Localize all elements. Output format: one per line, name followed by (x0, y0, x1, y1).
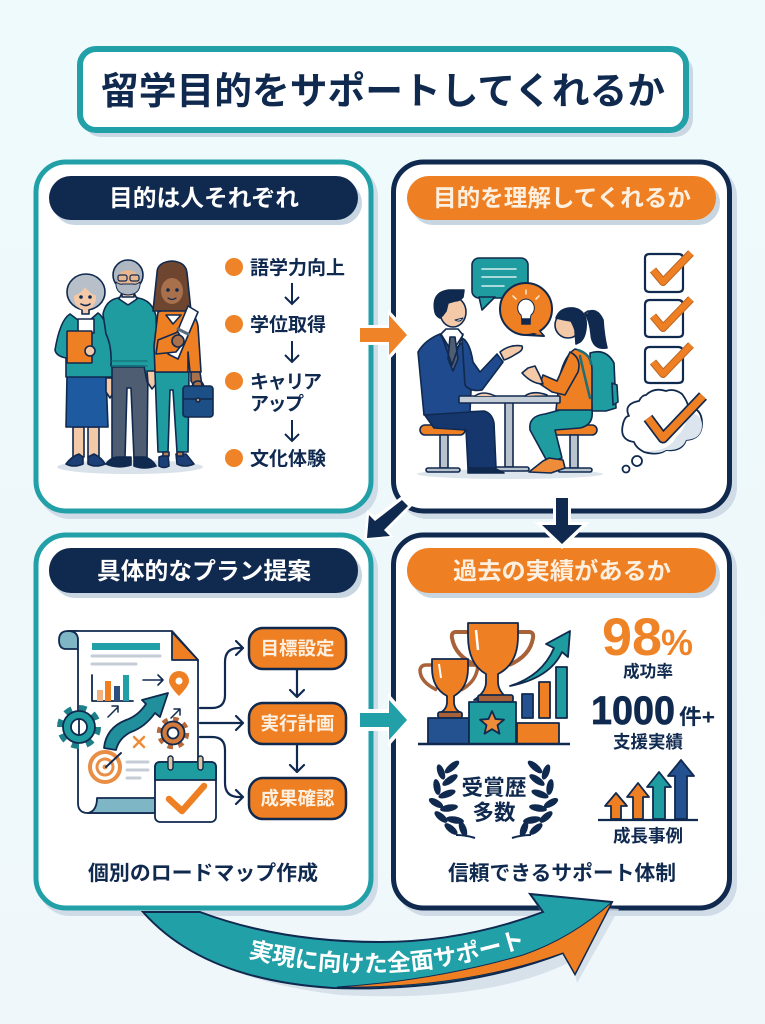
heading pill (407, 176, 720, 225)
stat: 1000+ (591, 689, 715, 752)
heading pill (49, 176, 362, 225)
laurel badge (427, 759, 560, 838)
arrow (285, 420, 299, 441)
stat: 1000+: 1000 (591, 689, 675, 733)
arrow (285, 283, 299, 304)
heading pill: 過去の実績があるか (453, 557, 672, 584)
step: goal (249, 628, 346, 669)
stat: 1000+: 支援実績 (613, 732, 683, 752)
heading pill (407, 548, 720, 598)
stat: 98%: 98 (602, 608, 662, 667)
purpose list: キャリア (250, 372, 322, 393)
title: 留学目的をサポートしてくれるか (101, 70, 665, 112)
right laurel (512, 759, 560, 838)
growth arrows (598, 760, 698, 820)
heading pill: 目的は人それぞれ (109, 185, 299, 211)
panel: track record (394, 535, 737, 916)
illustration: trophies and bars (418, 623, 570, 744)
step: results: 成果確認 (260, 788, 335, 809)
caption: 信頼できるサポート体制 (448, 862, 676, 885)
step: results (249, 778, 346, 819)
panel: purposes differ (36, 162, 378, 519)
panel: concrete plan (36, 535, 378, 916)
connectors (200, 641, 304, 804)
stat: 98%: 成功率 (623, 661, 673, 681)
step: goal: 目標設定 (260, 638, 334, 659)
swoosh arrow (140, 892, 619, 996)
purpose list: 文化体験 (250, 448, 326, 470)
purpose list: 学位取得 (250, 313, 326, 336)
arrow: panel 2 to 4 (534, 495, 590, 549)
stat: 98%: % (661, 622, 693, 663)
heading pill: 目的を理解してくれるか (433, 185, 691, 211)
illustration: three people (55, 260, 213, 474)
stat: 98% (602, 608, 693, 681)
arrow: panel 2 to 3 (364, 496, 412, 540)
left laurel (427, 759, 475, 838)
panel: understands purpose (394, 162, 737, 519)
heading pill: 具体的なプラン提案 (97, 558, 312, 584)
step: plan (249, 703, 346, 744)
title (80, 49, 693, 137)
illustration: consultation (417, 253, 703, 479)
purpose list: 語学力向上 (250, 256, 345, 279)
purpose list (225, 256, 345, 470)
laurel badge: 多数 (472, 801, 516, 825)
laurel badge: 受賞歴 (462, 776, 526, 800)
step: plan: 実行計画 (260, 713, 334, 734)
caption: 個別のロードマップ作成 (88, 861, 318, 885)
arrow: panel 1 to 2 (358, 309, 412, 361)
growth label: 成長事例 (613, 826, 683, 846)
illustration: roadmap document (59, 631, 216, 822)
purpose list: アップ (250, 393, 304, 415)
text guide (248, 945, 530, 972)
stat: 1000+: 件+ (679, 706, 715, 729)
swoosh arrow: 実現に向けた全面サポート (249, 932, 521, 974)
heading pill (49, 548, 362, 598)
arrow: panel 3 to 4 (358, 693, 412, 747)
arrow (285, 341, 299, 362)
